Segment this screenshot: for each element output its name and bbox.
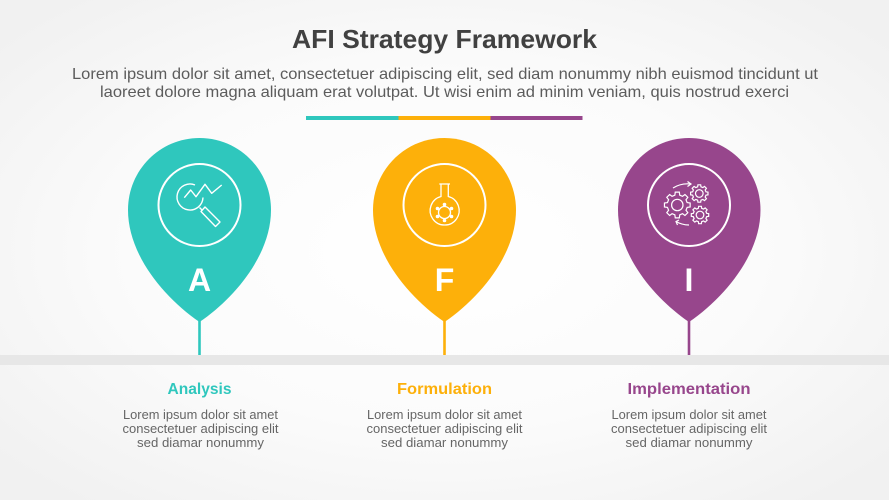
letter I: I [685, 262, 693, 298]
description: Formulation: sed diamar nonummy [381, 436, 509, 450]
description: Analysis: sed diamar nonummy [137, 436, 265, 450]
description: Implementation: sed diamar nonummy [626, 436, 753, 450]
column: Formulation [366, 381, 523, 450]
icon: flask [430, 184, 459, 225]
description: Formulation: Lorem ipsum dolor sit amet [367, 408, 523, 422]
description: Formulation [366, 408, 523, 450]
subtitle text: laoreet dolore magna aliquam erat volutpat. Ut wisi enim ad minim veniam, quis nostrud exerci [100, 84, 789, 101]
description: Analysis: Lorem ipsum dolor sit amet [123, 408, 279, 422]
title: AFI Strategy Framework [292, 24, 598, 54]
subtitle text: Lorem ipsum dolor sit amet, consectetuer adipiscing elit, sed diam nonummy nibh euismod tincidunt ut [72, 66, 819, 83]
subtitle text [72, 66, 819, 101]
description: Formulation: consectetuer adipiscing elit [366, 422, 523, 436]
pin: Implementation [618, 138, 760, 355]
description: Implementation: Lorem ipsum dolor sit amet [612, 408, 767, 422]
tricolor divider [306, 116, 582, 120]
heading: Analysis: Analysis [168, 381, 232, 398]
letter A: A [188, 262, 211, 298]
pin: Formulation [373, 138, 516, 355]
horizontal band [0, 355, 889, 365]
column: Analysis [122, 381, 279, 450]
description: Analysis: consectetuer adipiscing elit [122, 422, 279, 436]
letter F: F [435, 262, 454, 298]
column: Implementation [611, 381, 768, 450]
description: Implementation: consectetuer adipiscing elit [611, 422, 768, 436]
heading: Formulation: Formulation [397, 381, 492, 398]
description: Analysis [122, 408, 279, 450]
description: Implementation [611, 408, 768, 450]
heading: Implementation: Implementation [628, 381, 750, 398]
icon: magnifier with chart line [177, 184, 222, 226]
pin: Analysis [128, 138, 271, 355]
icon: gears with arrows [664, 182, 709, 225]
